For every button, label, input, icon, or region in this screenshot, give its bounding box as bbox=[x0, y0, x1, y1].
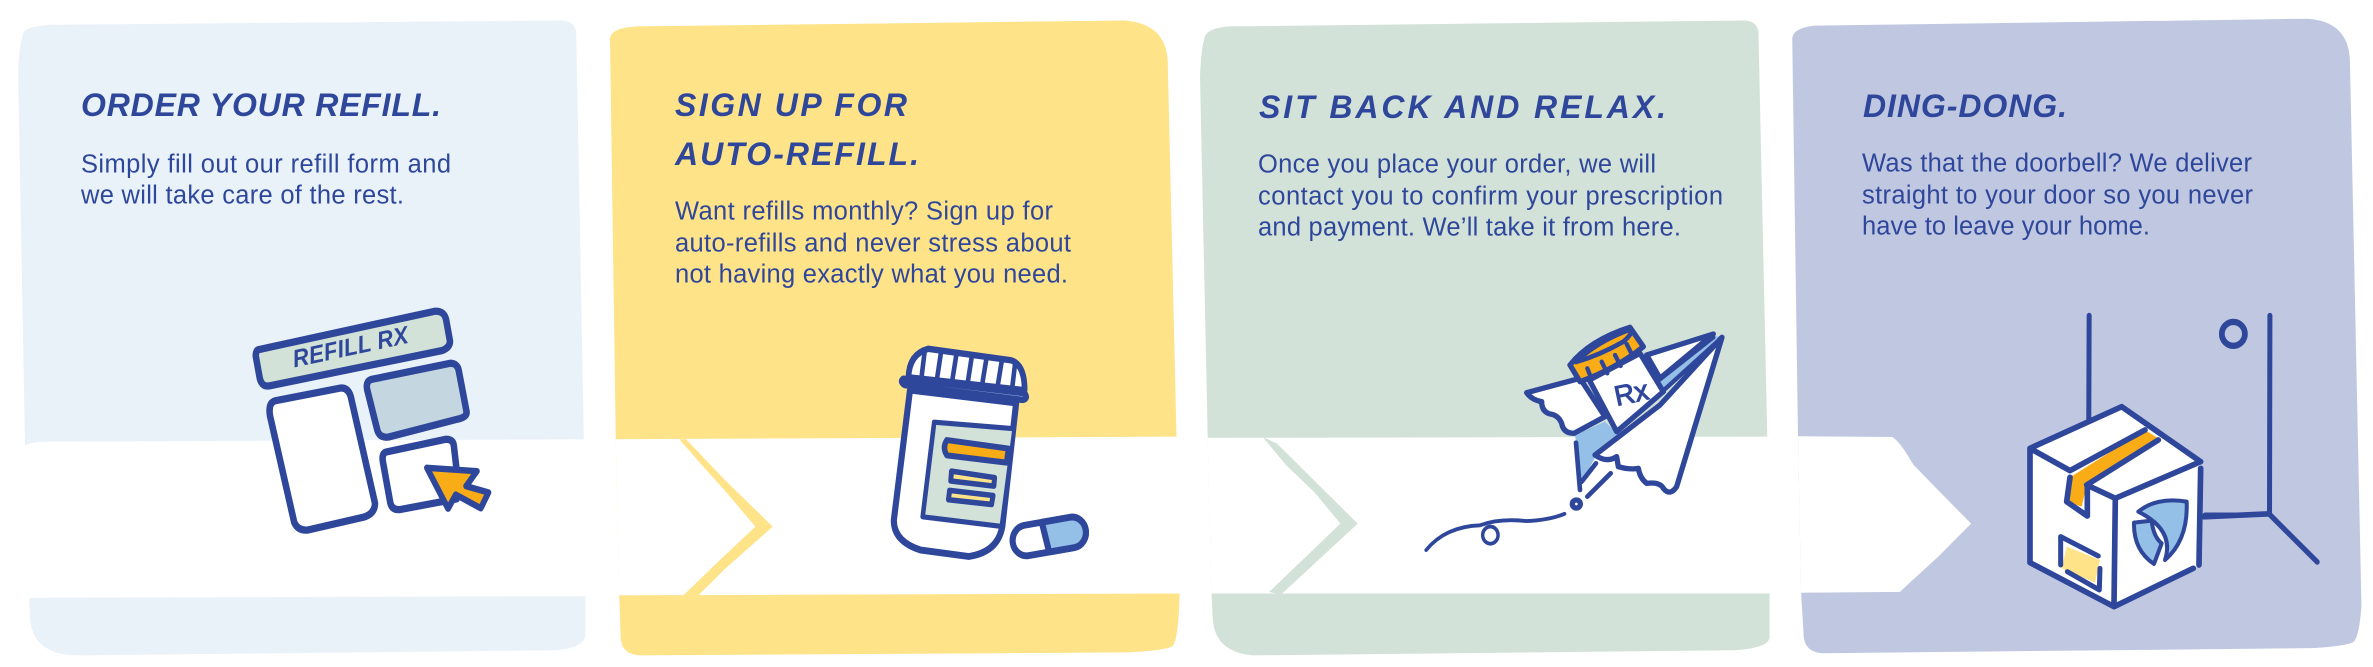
panel 4 background bbox=[1792, 19, 2361, 653]
heading: DING-DONG. bbox=[1863, 88, 2067, 124]
panel: ding-dong bbox=[1792, 19, 2361, 653]
body text: straight to your door so you never bbox=[1862, 182, 2254, 210]
body text: Want refills monthly? Sign up for bbox=[675, 198, 1054, 226]
body text bbox=[1258, 150, 1723, 242]
panel 3 white band with chevron bbox=[1208, 437, 1772, 595]
body text: not having exactly what you need. bbox=[675, 260, 1068, 288]
icon: paper plane with bottle bbox=[1527, 327, 1722, 508]
body text bbox=[80, 150, 451, 210]
panel: order your refill bbox=[18, 20, 592, 655]
body text bbox=[675, 198, 1071, 288]
body text: Simply fill out our refill form and bbox=[81, 150, 451, 178]
heading: ORDER YOUR REFILL. bbox=[81, 87, 441, 123]
heading bbox=[674, 87, 919, 172]
body text: we will take care of the rest. bbox=[80, 182, 404, 210]
icon: pill bottle and capsule bbox=[894, 349, 1088, 558]
body text: Was that the doorbell? We deliver bbox=[1862, 150, 2252, 178]
body text bbox=[1862, 150, 2254, 240]
icon: door frame and bell bbox=[2089, 316, 2317, 562]
panel 1 background bbox=[18, 20, 585, 655]
icon: paper plane with bottle: Rx bbox=[1611, 374, 1651, 412]
panel 2 background bbox=[610, 20, 1180, 655]
icon: delivery box bbox=[2028, 407, 2250, 608]
panel 2 white band with chevron bbox=[616, 437, 1182, 595]
icon: refill form with cursor: REFILL RX bbox=[290, 321, 411, 373]
arrow tip white band bbox=[1798, 436, 1971, 593]
body text: auto-refills and never stress about bbox=[675, 230, 1071, 258]
body text: contact you to confirm your prescription bbox=[1258, 182, 1723, 210]
icon: flight trail bbox=[1426, 514, 1565, 550]
heading: SIGN UP FOR bbox=[675, 87, 907, 123]
body text: Once you place your order, we will bbox=[1258, 150, 1656, 178]
panel: sign up for auto-refill bbox=[610, 20, 1182, 655]
body text: and payment. We’ll take it from here. bbox=[1258, 214, 1681, 242]
heading: SIT BACK AND RELAX. bbox=[1259, 89, 1666, 125]
panel: sit back and relax bbox=[1200, 20, 1772, 655]
body text: have to leave your home. bbox=[1862, 212, 2150, 240]
heading: AUTO-REFILL. bbox=[674, 136, 919, 172]
panel 1 white band bbox=[25, 439, 592, 598]
icon: refill form with cursor bbox=[256, 311, 488, 530]
panel 3 background bbox=[1200, 20, 1770, 655]
